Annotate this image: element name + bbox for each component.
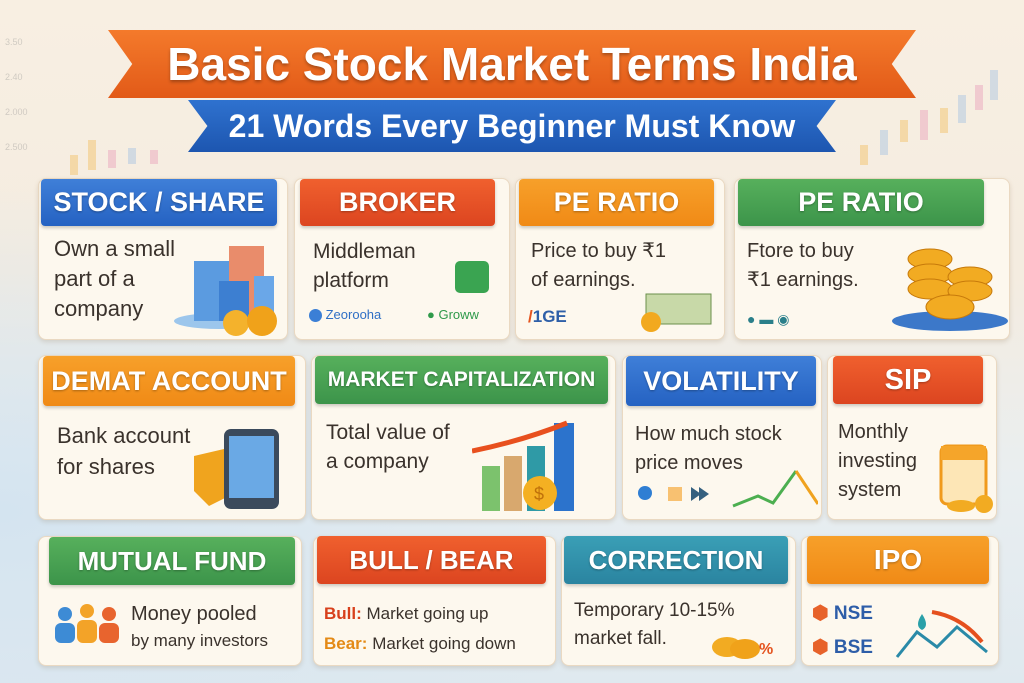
logos text: Zeorooha (326, 307, 381, 322)
panel: pe ratio 2: Ftore to buy (747, 240, 854, 262)
panel: broker: ● Groww (427, 307, 479, 322)
panel: sip: investing (838, 450, 917, 472)
panel: broker: platform (313, 269, 389, 292)
panel: pe ratio 1: of earnings. (531, 269, 636, 291)
panel: market capitalization: a company (326, 450, 429, 473)
panel: pe ratio 1 (515, 178, 725, 340)
panel: ipo (801, 536, 999, 666)
chart: rising bars (472, 420, 574, 511)
panel: market capitalization: MARKET CAPITALIZATION (328, 368, 595, 391)
panel: correction: Temporary 10-15% (574, 600, 735, 621)
panel: broker: Middleman (313, 240, 416, 263)
panel: mutual fund: by many investors (131, 631, 268, 650)
subtitle banner (188, 100, 836, 152)
panel: volatility: How much stock (635, 423, 782, 445)
panel: sip: system (838, 479, 901, 501)
panel: volatility: VOLATILITY (643, 366, 799, 396)
panel: pe ratio 1: PE RATIO (554, 187, 679, 217)
subtitle banner: 21 Words Every Beginner Must Know (229, 108, 795, 144)
panel: sip: Monthly (838, 421, 908, 443)
panel: demat: DEMAT ACCOUNT (51, 366, 287, 396)
panel: mutual fund (38, 536, 302, 666)
panel: pe ratio 1: Price to buy ₹1 (531, 240, 666, 262)
panel: sip (827, 355, 997, 520)
panel: bull/bear (313, 536, 556, 666)
background chart: 2.500 (5, 142, 28, 152)
panel: pe ratio 2: ₹1 earnings. (747, 269, 859, 291)
panel: mutual fund: MUTUAL FUND (78, 546, 266, 576)
icon: coin stacks (892, 248, 1008, 331)
icon: coins percent: % (759, 641, 773, 658)
panel: bull/bear: Bear: Market going down (324, 634, 516, 653)
panel: demat: for shares (57, 454, 155, 479)
panel: stock/share: Own a small (54, 236, 175, 261)
panel: ipo: IPO (874, 544, 922, 575)
title banner (108, 30, 916, 98)
icon: cash (641, 294, 712, 332)
panel: market capitalization: Total value of (326, 421, 450, 444)
background chart: 2.40 (5, 72, 23, 82)
icon: people (55, 604, 119, 643)
chart: rising bars: $ (534, 484, 544, 504)
panel: ipo: ⬢ BSE (812, 637, 873, 658)
panel: demat: Bank account (57, 423, 190, 448)
title banner: Basic Stock Market Terms India (167, 38, 857, 90)
panel: mutual fund: Money pooled (131, 603, 257, 625)
panel: demat (38, 355, 306, 520)
panel: pe ratio 2 (734, 178, 1010, 340)
panel: stock/share (38, 178, 288, 340)
panel: market capitalization (311, 355, 616, 520)
panel: bull/bear: Bull: Market going up (324, 604, 488, 623)
background chart: 3.50 (5, 37, 23, 47)
panel: correction: market fall. (574, 628, 667, 649)
panel: bull/bear: BULL / BEAR (349, 545, 514, 575)
panel: stock/share: company (54, 296, 143, 321)
panel: broker: BROKER (339, 187, 456, 217)
background chart: 2.000 (5, 107, 28, 117)
icon: groww (455, 261, 489, 293)
icon: phone and shield (194, 429, 279, 509)
panel: correction: CORRECTION (589, 545, 763, 575)
icon: coins percent (712, 637, 773, 659)
panel: broker (294, 178, 510, 340)
chart: falling arrow (896, 610, 988, 658)
panel: volatility (622, 355, 822, 520)
panel: correction (561, 536, 796, 666)
panel: ipo: ⬢ NSE (812, 603, 873, 624)
panel: stock/share: part of a (54, 266, 135, 291)
panel: pe ratio 2: ● ▬ ◉ (747, 311, 789, 327)
panel: pe ratio 2: PE RATIO (798, 187, 924, 217)
panel: sip: SIP (885, 364, 931, 396)
panel: stock/share: STOCK / SHARE (53, 187, 265, 217)
chart: line (638, 470, 818, 508)
icon: buildings and coins (174, 246, 277, 336)
panel: volatility: price moves (635, 452, 743, 474)
panel: pe ratio 1: /1GE (528, 307, 567, 326)
icon: calendar with coins (940, 444, 993, 513)
